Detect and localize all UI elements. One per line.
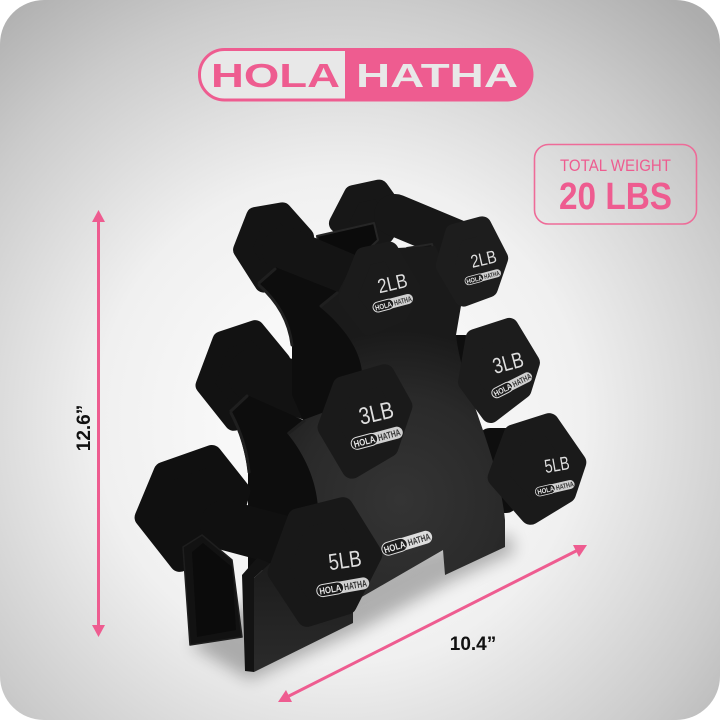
dumbbell: 2LB right: 2LB [469,246,499,272]
dumbbell: 5LB right [498,423,576,515]
brand logo: HATHA [356,57,518,94]
rack side wall [229,267,375,570]
top bracket [317,223,438,270]
rack fin strips [231,269,337,472]
dumbbell: 2LB right: HATHA [483,270,501,281]
rack logo: HOLA [383,539,407,556]
height label: 12.6” [74,405,95,451]
dumbbell: 3LB left: HOLA [353,434,377,450]
dumbbell: 5LB left: 5LB [327,545,363,575]
width dimension arrow [278,545,587,702]
width label: 10.4” [450,634,496,655]
callout: total weight: 20 LBS [559,176,672,218]
dumbbell: 5LB left: HATHA [343,578,368,593]
hidden rear heads behind right dumbbells [445,335,518,513]
dumbbell: 5LB right: HOLA [537,486,555,496]
dumbbell: 3LB left [328,374,404,468]
dumbbell: 3LB left: 3LB [356,397,396,431]
rack logo: HATHA [407,532,432,549]
rack front foot [242,558,353,672]
rack rear foot [183,535,242,645]
dumbbell: 5LB right: HATHA [555,481,575,492]
dumbbell: 2LB right: HOLA [466,275,483,286]
dumbbell: 3LB left: HATHA [377,427,402,444]
dumbbell: 3LB right: HOLA [492,382,514,399]
dumbbell 2LB left rear head and handle [242,212,360,283]
dumbbell: 3LB right: 3LB [490,347,526,379]
callout: total weight: TOTAL WEIGHT [560,156,671,175]
handle: 2LB right [395,215,455,240]
rack centre plate [287,246,505,623]
dumbbell 5LB left rear head and handle [145,455,300,562]
rack logo [380,529,434,557]
floor shadow [190,535,515,680]
top rear dumbbell head: 2LB right [338,189,398,238]
brand logo [200,48,534,101]
dumbbell: 5LB right: 5LB [543,453,571,478]
dumbbell: 2LB left [347,251,414,326]
dumbbell: 3LB right [467,327,534,414]
callout: total weight [534,144,696,224]
dumbbell: 2LB left: HOLA [374,299,393,313]
dumbbell: 3LB right: HATHA [511,372,533,389]
dumbbell: 5LB left: HOLA [319,583,342,598]
dumbbell 3LB left rear head and handle [205,329,345,422]
height dimension arrow [92,210,105,637]
dumbbell: 5LB left [278,507,372,617]
brand logo: HOLA [211,57,340,94]
dumbbell: 2LB left: HATHA [393,294,413,308]
dumbbell: 2LB left: 2LB [376,270,410,298]
dumbbell: 2LB right [445,226,502,297]
rack and dumbbells product [145,189,576,680]
